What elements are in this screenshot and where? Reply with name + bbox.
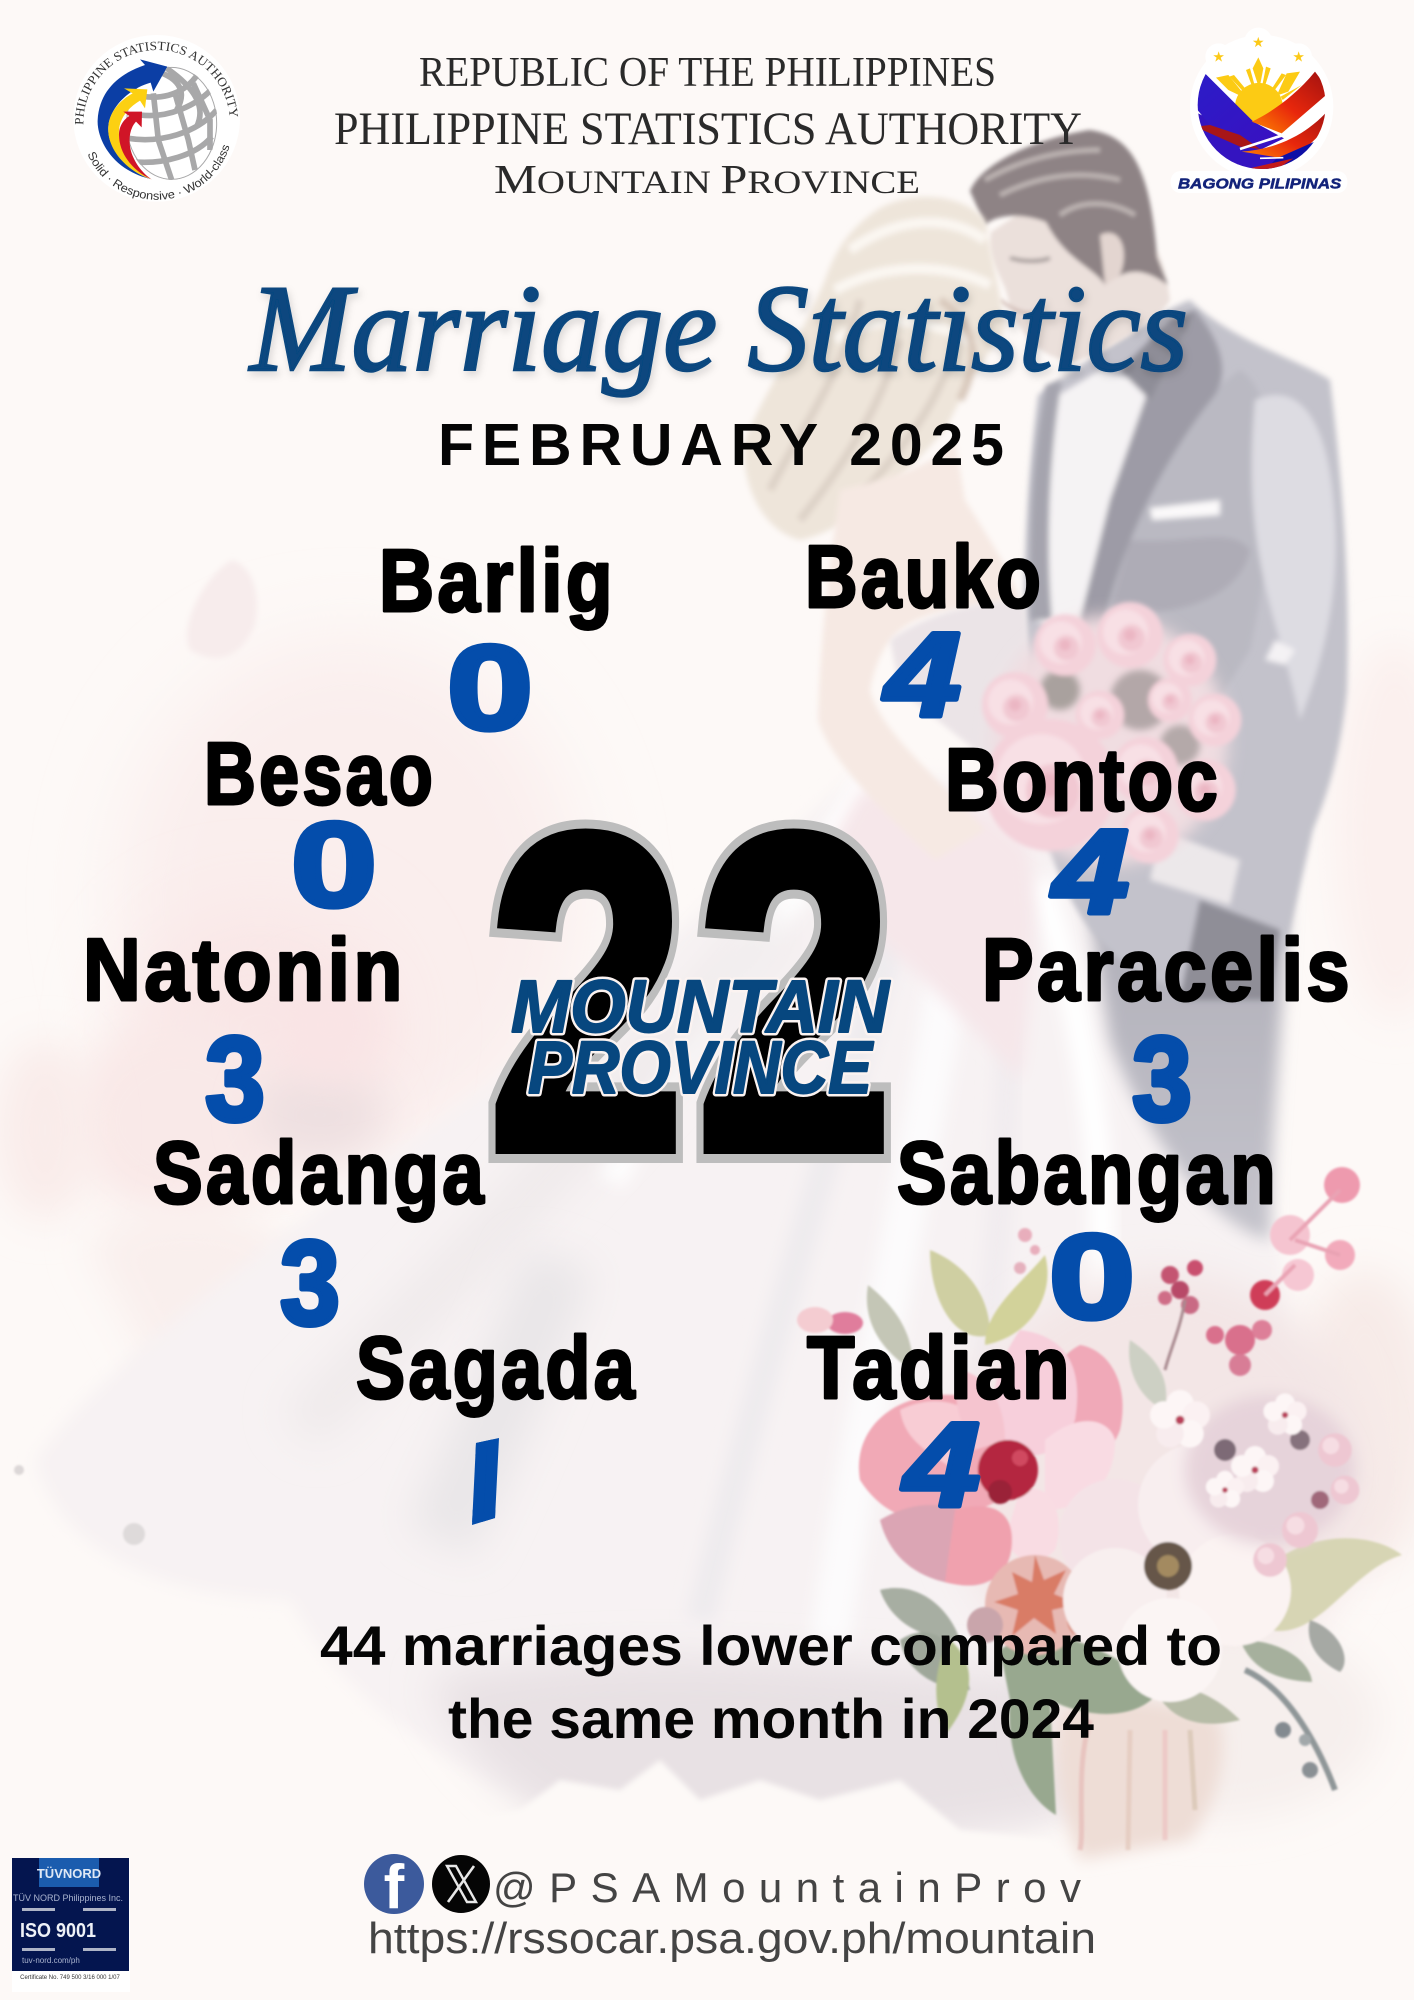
- name: Barlig: [379, 531, 616, 630]
- white flower: [1059, 1443, 1291, 1702]
- title: Marriage Statistics: [248, 260, 1188, 397]
- municipality: Natonin: [83, 920, 406, 1146]
- icon: facebook: [364, 1853, 424, 1922]
- badge standard: ISO 9001: [20, 1920, 96, 1942]
- seal text top: PHILIPPINE STATISTICS AUTHORITY: [75, 42, 238, 124]
- stars: [1212, 35, 1305, 66]
- badge white base: [12, 1858, 130, 1992]
- seal text bottom: Solid · Responsive · World-class: [88, 145, 230, 200]
- badge rules: [22, 1908, 55, 1911]
- blue arrow: [98, 59, 167, 179]
- count: 1: [446, 1414, 519, 1548]
- municipality: Sabangan: [897, 1123, 1279, 1344]
- black total number: 2: [488, 742, 685, 1243]
- badge brand: TÜVNORD: [37, 1866, 101, 1881]
- province label outline: PROVINCE: [528, 1026, 874, 1109]
- jacket lapels and shirt: [1030, 310, 1336, 1000]
- name: Bontoc: [945, 730, 1221, 829]
- municipality: Sadanga: [153, 1123, 487, 1350]
- torn watercolor edge at foot: [420, 1760, 1100, 1910]
- center total: 22: [488, 742, 893, 1243]
- berries and pink sprigs: [797, 1167, 1360, 1376]
- stars: ★: [1292, 50, 1305, 66]
- municipality: Bauko: [805, 527, 1044, 742]
- province label outline: [511, 965, 890, 1109]
- black total number: [488, 742, 893, 1243]
- header line 1: REPUBLIC OF THE PHILIPPINES: [419, 50, 996, 96]
- name: Sadanga: [153, 1123, 487, 1222]
- black total number: 2: [696, 742, 893, 1243]
- comparison statement: [320, 1614, 1222, 1750]
- count: 4: [902, 1398, 980, 1532]
- bottom wash under flowers: [950, 1270, 1380, 1860]
- stars: ★: [1212, 50, 1225, 66]
- icon: facebook: f: [384, 1853, 405, 1922]
- count: 4: [1051, 805, 1129, 939]
- name: Sabangan: [897, 1123, 1279, 1222]
- statement line 1: 44 marriages lower compared to: [320, 1614, 1222, 1677]
- municipality: Barlig: [379, 531, 616, 755]
- stars: ★: [1252, 35, 1265, 51]
- badge navy panel: [12, 1858, 129, 1971]
- groom suit jacket: [1024, 300, 1348, 990]
- statement line 2: the same month in 2024: [448, 1687, 1094, 1750]
- small white blossoms cluster: [1150, 1390, 1359, 1577]
- ISO 9001 certification badge: [12, 1858, 130, 1992]
- seal white disc: [73, 35, 240, 202]
- yellow arrow: [108, 88, 152, 179]
- badge website: tuv-nord.com/ph: [22, 1956, 80, 1965]
- municipality: Besao: [204, 724, 436, 932]
- logo: Bagong Pilipinas: [1178, 37, 1342, 189]
- grey outline of total: [488, 742, 893, 1243]
- count: 3: [1132, 1012, 1192, 1146]
- bride hair: [744, 197, 1005, 540]
- red arrow: [119, 112, 152, 179]
- subtitle date: FEBRUARY 2025: [438, 412, 1004, 478]
- count: 0: [447, 621, 533, 755]
- province label: PROVINCE: [528, 1026, 874, 1109]
- municipality: Sagada: [356, 1332, 636, 1525]
- logo: Philippine Statistics Authority seal: [75, 42, 238, 200]
- name: Besao: [204, 724, 436, 823]
- small orange flower: [967, 1555, 1103, 1655]
- logo wordmark: BAGONG PILIPINAS: [1178, 176, 1342, 192]
- groom head and hair: [970, 130, 1170, 362]
- flower bouquet: [797, 1167, 1402, 1850]
- count: 0: [291, 798, 377, 932]
- watercolor wash: left pink bloom: [0, 560, 580, 1420]
- social handle: @PSAMountainProv: [493, 1864, 1081, 1911]
- badge company: TÜV NORD Philippines Inc.: [13, 1893, 123, 1903]
- watercolor wash: right side pink: [1295, 640, 1414, 1570]
- foliage: [867, 1250, 1402, 1815]
- pink peony: [859, 1330, 1123, 1586]
- globe: [127, 67, 217, 180]
- social media row: [364, 1853, 1081, 1922]
- header line 2: PHILIPPINE STATISTICS AUTHORITY: [334, 103, 1082, 155]
- bride shoulder and arm: [818, 440, 1020, 860]
- bride bodice: [890, 600, 1030, 770]
- province label outline: MOUNTAIN: [511, 965, 890, 1048]
- badge blue tab: [39, 1858, 99, 1887]
- website url: https://rssocar.psa.gov.ph/mountain: [368, 1914, 1096, 1963]
- name: Bauko: [805, 527, 1044, 626]
- grey outline of total: 2: [488, 742, 685, 1243]
- province label: [511, 965, 890, 1109]
- grey outline of total: 2: [696, 742, 893, 1243]
- count: 0: [1049, 1210, 1135, 1344]
- count: 4: [883, 608, 961, 742]
- drips: [1080, 1720, 1195, 1850]
- rose bouquet: [982, 602, 1241, 865]
- municipality: Paracelis: [982, 920, 1353, 1146]
- name: Natonin: [83, 920, 406, 1019]
- logo white halo: [1171, 28, 1347, 193]
- sun: [1216, 57, 1302, 125]
- name: Sagada: [356, 1318, 638, 1417]
- wedding dress skirt: [14, 770, 1285, 1853]
- province label: MOUNTAIN: [511, 965, 890, 1048]
- municipality: Tadian: [807, 1318, 1073, 1532]
- name: Paracelis: [982, 920, 1353, 1019]
- municipality: Bontoc: [945, 730, 1221, 939]
- count: 3: [280, 1216, 340, 1350]
- header line 3: MOUNTAIN PROVINCE: [494, 156, 920, 202]
- count: 3: [205, 1012, 265, 1146]
- bowl bands: [1198, 72, 1325, 169]
- name: Tadian: [807, 1318, 1073, 1417]
- groom legs: [1085, 790, 1290, 1240]
- header text block: [334, 50, 1082, 202]
- icon: X: [432, 1855, 490, 1913]
- badge certificate number: Certificate No. 749 500 3/16 000 1/07: [20, 1975, 121, 1981]
